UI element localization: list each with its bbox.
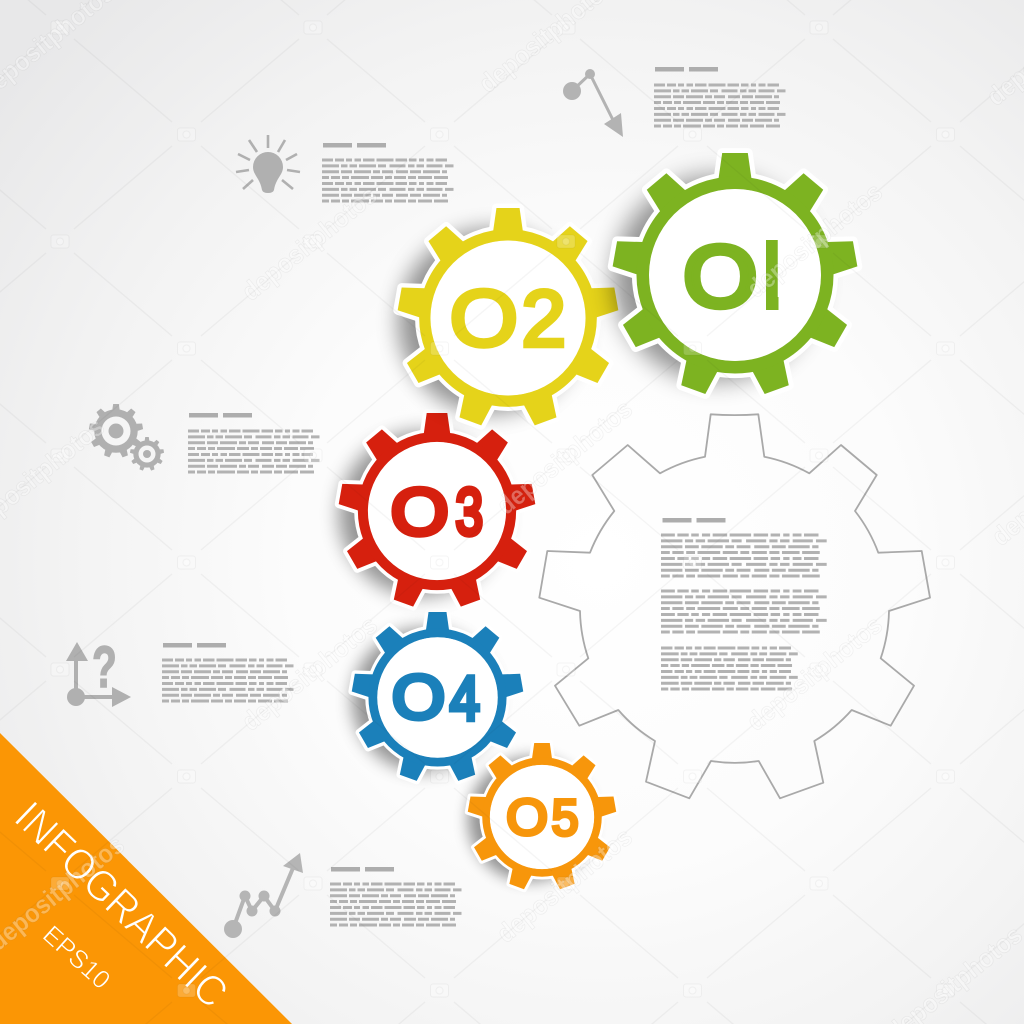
label 02: O xyxy=(450,273,518,363)
icon: axes with question mark xyxy=(66,635,131,707)
text block: two gears xyxy=(188,413,320,472)
icon: two gears xyxy=(89,404,164,471)
banner subtitle: EPS10 xyxy=(37,919,117,995)
label 02 xyxy=(450,273,566,363)
label 04: 4 xyxy=(450,664,480,733)
gear 01 green xyxy=(612,153,858,395)
gear 03 red xyxy=(338,413,536,608)
label 03: O xyxy=(391,475,448,549)
label 05: 5 xyxy=(552,789,579,846)
gear 05 orange xyxy=(467,743,617,890)
label 04: O xyxy=(392,663,445,732)
label 04 xyxy=(392,663,480,733)
label 03 xyxy=(391,475,483,549)
watermark text: depositphotos xyxy=(491,393,638,521)
icon: axes with question mark: ? xyxy=(92,635,117,700)
watermark text: depositphotos xyxy=(741,609,888,737)
icon: light bulb xyxy=(236,135,300,193)
label 05 xyxy=(506,789,579,846)
outlined large gear xyxy=(539,414,930,798)
icon: rising chart arrow xyxy=(224,853,303,938)
gear 02 yellow xyxy=(397,208,619,426)
icon: branching arrow xyxy=(563,69,623,137)
text block: large gear content xyxy=(661,518,827,689)
label 03: 3 xyxy=(456,476,483,549)
text block: top right xyxy=(654,67,786,126)
text block: rising chart xyxy=(330,867,462,925)
label 05: O xyxy=(506,790,548,846)
orange corner banner xyxy=(0,733,292,1024)
label 01 xyxy=(684,240,778,310)
watermark text: depositphotos xyxy=(236,609,383,737)
watermark text: depositphotos xyxy=(741,176,888,304)
text block: light bulb xyxy=(322,143,454,201)
watermark text: depositphotos xyxy=(236,179,383,307)
label 01: 1 xyxy=(742,225,789,333)
watermark text: depositphotos xyxy=(491,821,638,949)
label 02: 2 xyxy=(522,274,566,363)
text block: axes xyxy=(162,643,294,701)
gear 04 blue xyxy=(351,612,524,782)
label 01: O xyxy=(684,229,757,325)
